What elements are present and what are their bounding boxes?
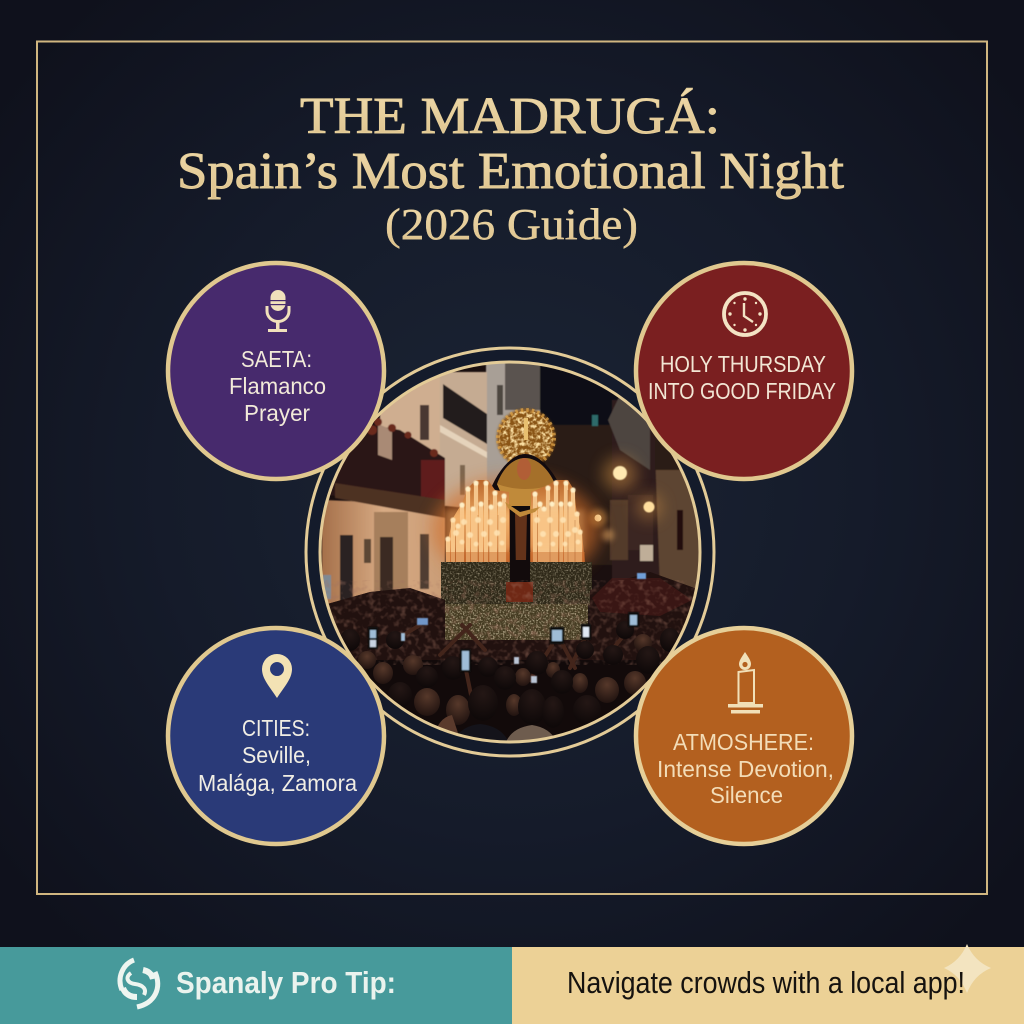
title: THE MADRUGÁ:: [300, 87, 720, 145]
icon: candle: [728, 652, 763, 714]
text: holy thursday: INTO GOOD FRIDAY: [648, 378, 836, 404]
panel: atmosphere: [636, 628, 852, 844]
crowd heads: [340, 621, 680, 745]
icon: sparkle: [944, 944, 991, 993]
text: atmosphere: Intense Devotion,: [657, 756, 834, 782]
text: saeta: [229, 346, 326, 426]
text: saeta: SAETA:: [241, 346, 312, 372]
text: saeta: Flamanco: [229, 373, 326, 399]
title: (2026 Guide): [385, 200, 638, 249]
label text: Spanaly Pro Tip:: [176, 965, 396, 1000]
Virgin mantle and halo: [492, 408, 557, 510]
text: atmosphere: [657, 729, 834, 808]
pale tall building: [486, 362, 540, 500]
text: holy thursday: [648, 351, 836, 404]
candle glow: [432, 476, 600, 584]
street lamps: [589, 457, 662, 541]
text: holy thursday: HOLY THURSDAY: [660, 351, 826, 377]
gold frame: [37, 42, 987, 894]
banner: pro tip label: [0, 947, 512, 1024]
panel: holy thursday: [636, 263, 852, 479]
right buildings: [611, 399, 660, 578]
text: atmosphere: ATMOSHERE:: [673, 729, 814, 755]
flowers: [441, 560, 592, 605]
central photo: procession: [320, 360, 702, 745]
central ring: [306, 348, 714, 756]
balcony: [330, 426, 446, 496]
icon: map pin: [262, 654, 292, 698]
icon: spanaly logo: [120, 960, 158, 1007]
title: [177, 87, 845, 249]
photo inner ring: [320, 362, 700, 742]
street background and sky: [322, 360, 702, 620]
title: Spain’s Most Emotional Night: [177, 143, 845, 200]
text: saeta: Prayer: [244, 400, 310, 426]
text: cities: Seville,: [242, 742, 311, 768]
crowd mass: [328, 572, 695, 621]
icon: microphone: [266, 290, 290, 332]
text: atmosphere: Silence: [710, 782, 783, 808]
text: cities: Malága, Zamora: [198, 770, 357, 796]
float base: [445, 604, 588, 640]
dress front: [505, 502, 540, 560]
banner: tip message: [512, 944, 1024, 1024]
candles: [445, 480, 585, 565]
panel: cities: [168, 628, 384, 844]
middle building: [436, 372, 487, 510]
text: cities: [198, 715, 357, 796]
raised arms: [395, 625, 632, 700]
icon: clock: [724, 293, 766, 335]
left upper wall: [379, 378, 440, 454]
panel: saeta: [168, 263, 384, 479]
left wall: [322, 500, 446, 604]
tip text: Navigate crowds with a local app!: [567, 965, 965, 1000]
raised phones: [368, 573, 646, 683]
text: cities: CITIES:: [242, 715, 310, 741]
